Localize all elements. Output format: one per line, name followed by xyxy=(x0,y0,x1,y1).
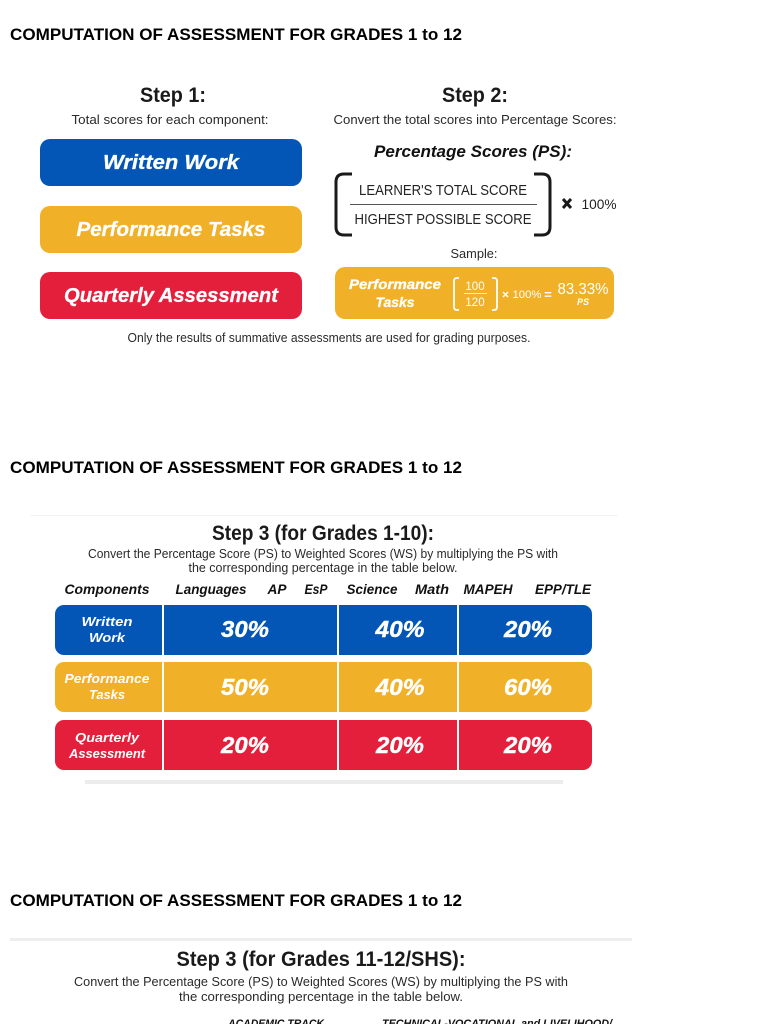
formula: 100% xyxy=(582,196,616,212)
table row: quarterly assessment: Quarterly xyxy=(75,730,140,745)
table row: written work xyxy=(55,605,592,655)
button: performance tasks: Performance Tasks xyxy=(76,219,266,241)
note: Only the results of summative assessments are used for grading purposes. xyxy=(128,331,530,345)
panel: step 3 grades 1-10 xyxy=(30,515,618,784)
sample box: 83.33% xyxy=(558,281,609,298)
table row: quarterly assessment: 20% xyxy=(503,732,552,758)
heading: section 2: COMPUTATION OF ASSESSMENT FOR GRADES 1 to 12 xyxy=(10,459,462,477)
sample box: = xyxy=(544,287,552,302)
table header: Science xyxy=(346,582,398,597)
table header: MAPEH xyxy=(464,582,513,597)
step 3 title: Step 3 (for Grades 1-10): xyxy=(212,522,434,545)
heading: section 1: COMPUTATION OF ASSESSMENT FOR GRADES 1 to 12 xyxy=(10,26,462,44)
table row: quarterly assessment xyxy=(55,720,592,770)
table row: written work: 40% xyxy=(374,616,424,642)
table row: quarterly assessment: 20% xyxy=(375,732,424,758)
table header: Components xyxy=(64,582,150,597)
step 3 description: Convert the Percentage Score (PS) to Weighted Scores (WS) by multiplying the PS with xyxy=(88,547,558,561)
heading: section 3: COMPUTATION OF ASSESSMENT FOR GRADES 1 to 12 xyxy=(10,892,462,910)
table header xyxy=(64,582,592,597)
table header: EPP/TLE xyxy=(535,582,592,597)
table header: tracks xyxy=(227,1018,614,1024)
step 3 shs description xyxy=(74,975,568,1004)
panel: step 2 xyxy=(334,84,616,319)
sample box: PS xyxy=(577,297,589,307)
table row: written work: Work xyxy=(89,630,126,645)
table row: performance tasks xyxy=(55,662,592,712)
sample box: 120 xyxy=(465,297,485,309)
sample box xyxy=(335,267,614,319)
button: performance tasks xyxy=(40,206,302,253)
button: written work: Written Work xyxy=(103,152,240,174)
step 2 subtitle: Convert the total scores into Percentage Scores: xyxy=(334,113,616,127)
table row: performance tasks: Performance xyxy=(64,671,150,686)
panel: step 1 xyxy=(40,84,302,319)
sample box: Tasks xyxy=(376,294,415,310)
percentage scores heading: Percentage Scores (PS): xyxy=(374,142,572,161)
table row: quarterly assessment: 20% xyxy=(220,732,269,758)
step 2 title: Step 2: xyxy=(442,84,508,107)
table row: written work: 30% xyxy=(221,616,269,642)
table row: performance tasks: 60% xyxy=(504,674,552,700)
table row: written work: 20% xyxy=(503,616,552,642)
formula: HIGHEST POSSIBLE SCORE xyxy=(354,212,532,228)
table row: performance tasks: 40% xyxy=(374,674,424,700)
step 1 subtitle: Total scores for each component: xyxy=(72,113,268,127)
button: written work xyxy=(40,139,302,186)
step 3 description: the corresponding percentage in the table below. xyxy=(188,561,458,575)
formula: LEARNER'S TOTAL SCORE xyxy=(359,183,527,199)
table row: written work: Written xyxy=(82,614,133,629)
step 3 description xyxy=(88,547,558,575)
table row: performance tasks: 50% xyxy=(221,674,269,700)
sample box: 100% xyxy=(512,289,542,301)
button: quarterly assessment xyxy=(40,272,302,319)
step 3 shs description: the corresponding percentage in the table below. xyxy=(179,990,463,1004)
table header: AP xyxy=(266,582,287,597)
table row: performance tasks: Tasks xyxy=(89,687,125,702)
table header: Math xyxy=(415,582,449,597)
step 1 title: Step 1: xyxy=(140,84,206,107)
table header: EsP xyxy=(304,582,328,597)
sample box: Performance xyxy=(349,276,441,292)
table header: Languages xyxy=(176,582,247,597)
panel: step 3 grades 11-12 xyxy=(10,938,632,1024)
sample box: 100 xyxy=(465,281,485,293)
button: quarterly assessment: Quarterly Assessment xyxy=(64,285,279,307)
sample label: Sample: xyxy=(450,247,498,261)
formula xyxy=(336,174,616,235)
step 3 shs description: Convert the Percentage Score (PS) to Weighted Scores (WS) by multiplying the PS with xyxy=(74,975,568,989)
step 3 shs title: Step 3 (for Grades 11-12/SHS): xyxy=(176,948,466,971)
table row: quarterly assessment: Assessment xyxy=(68,746,146,761)
